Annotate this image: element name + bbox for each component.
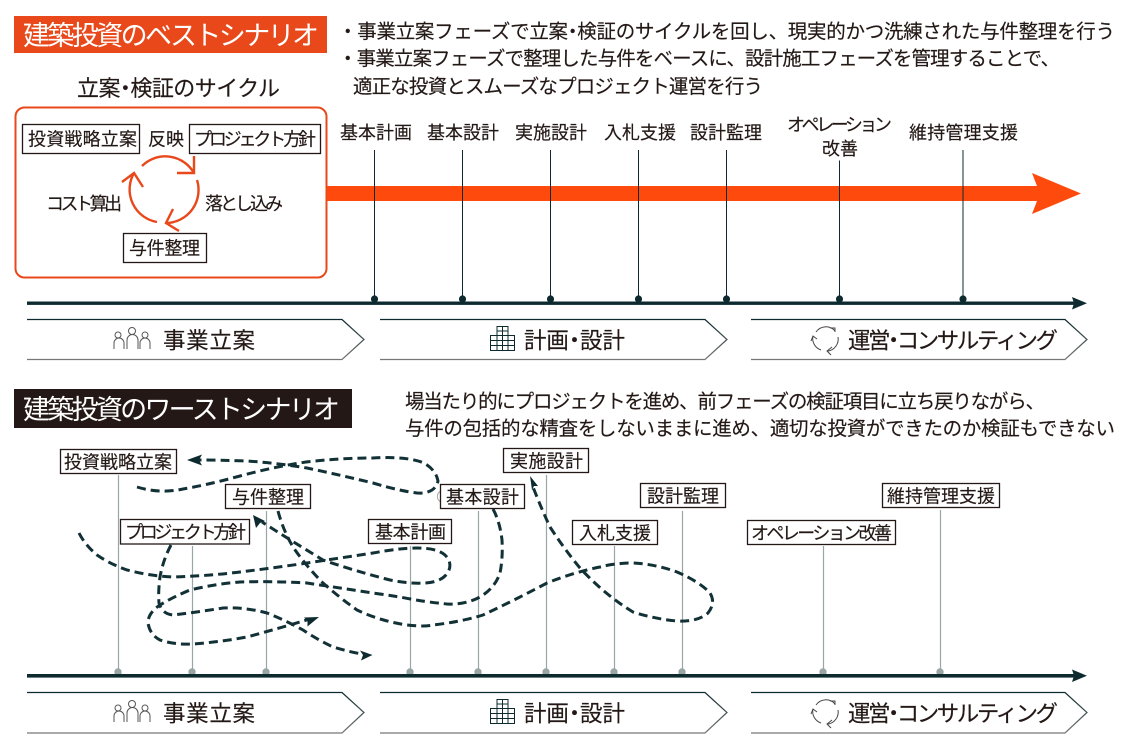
box: project policy: プロジェクト方針: [194, 130, 316, 150]
heading: worst scenario: 建築投資のワーストシナリオ: [23, 395, 340, 425]
box: operation improvement: オペレーション改善: [751, 524, 892, 544]
icon: cycle arrows: [122, 156, 199, 231]
stage labels: best scenario: 基本計画: [340, 123, 412, 143]
arrow: orange process arrow: [327, 173, 1081, 214]
stage labels: best scenario: 実施設計: [515, 123, 587, 143]
text block: worst scenario description: [405, 391, 1115, 440]
phase: operations and consulting: [751, 320, 1087, 360]
stage boxes: worst scenario: [60, 448, 1000, 544]
box: requirements: 与件整理: [232, 488, 304, 508]
box: maintenance support: 維持管理支援: [887, 486, 995, 506]
timeline: best scenario: [27, 150, 1087, 310]
box: requirements: [124, 234, 206, 262]
arrows: chaotic dashed paths: [79, 454, 713, 660]
box: basic design: 基本設計: [446, 488, 519, 508]
phase: operations and consulting: 運営・コンサルティング: [848, 328, 1058, 354]
box: investment strategy: 投資戦略立案: [28, 130, 137, 150]
stage labels: best scenario: 改善: [822, 139, 858, 159]
label: cost estimate: コスト算出: [46, 194, 122, 214]
label: incorporate: 落とし込み: [205, 194, 283, 214]
text block: best scenario description: ・事業立案フェーズで整理した与件をベースに、設計施工フェーズを管理することで、: [338, 48, 1060, 70]
box: detailed design: 実施設計: [510, 452, 583, 472]
phase: operations and consulting: 運営・コンサルティング: [848, 702, 1058, 726]
label: reflect: 反映: [148, 130, 184, 150]
box: basic plan: 基本計画: [375, 522, 446, 542]
heading: planning cycle: 立案・検証のサイクル: [77, 76, 280, 101]
box: project policy: [190, 124, 320, 154]
stage labels: best scenario: 基本設計: [427, 123, 499, 143]
phase: planning and design: 計画・設計: [524, 702, 625, 726]
box: requirements: 与件整理: [129, 238, 200, 258]
stage labels: best scenario: 維持管理支援: [909, 123, 1018, 143]
icon: people: [114, 700, 150, 722]
phase: planning and design: [380, 320, 727, 360]
stage labels: best scenario: オペレーション: [787, 115, 892, 135]
phase: operations and consulting: [751, 692, 1087, 733]
panel: planning and verification cycle: [16, 108, 326, 278]
text block: worst scenario description: 場当たり的にプロジェクトを進め、前フェーズの検証項目に立ち戻りながら、: [405, 391, 1045, 413]
phase: business planning: 事業立案: [163, 328, 255, 354]
icon: building: [490, 700, 514, 724]
box: project policy: プロジェクト方針: [125, 522, 246, 542]
icon: cycle: [811, 327, 838, 355]
phase: planning and design: 計画・設計: [524, 328, 625, 354]
text block: best scenario description: [338, 21, 1115, 98]
phase: planning and design: [380, 692, 727, 733]
stage labels: best scenario: 入札支援: [604, 123, 676, 143]
box: design supervision: 設計監理: [647, 486, 719, 506]
box: bidding support: 入札支援: [579, 524, 651, 544]
stage labels: best scenario: 設計監理: [690, 123, 762, 143]
heading: best scenario: 建築投資のベストシナリオ: [23, 21, 319, 51]
icon: cycle: [811, 700, 838, 728]
text block: worst scenario description: 与件の包括的な精査をしないままに進め、適切な投資ができたのか検証もできない: [405, 418, 1115, 440]
text block: best scenario description: 適正な投資とスムーズなプロジェクト運営を行う: [353, 76, 763, 98]
phase bar: worst scenario: [27, 692, 1087, 733]
box: investment strategy: [22, 124, 140, 154]
icon: people: [114, 328, 150, 349]
box: investment strategy: 投資戦略立案: [64, 452, 172, 472]
icon: building: [490, 326, 514, 350]
phase: business planning: [27, 320, 364, 360]
phase bar: best scenario: [27, 320, 1087, 360]
text block: best scenario description: ・事業立案フェーズで立案・検証のサイクルを回し、現実的かつ洗練された与件整理を行う: [338, 21, 1115, 43]
phase: business planning: [27, 692, 364, 733]
phase: business planning: 事業立案: [163, 702, 255, 726]
stage labels: best scenario: [340, 115, 1018, 159]
timeline: worst scenario: [27, 475, 1087, 682]
